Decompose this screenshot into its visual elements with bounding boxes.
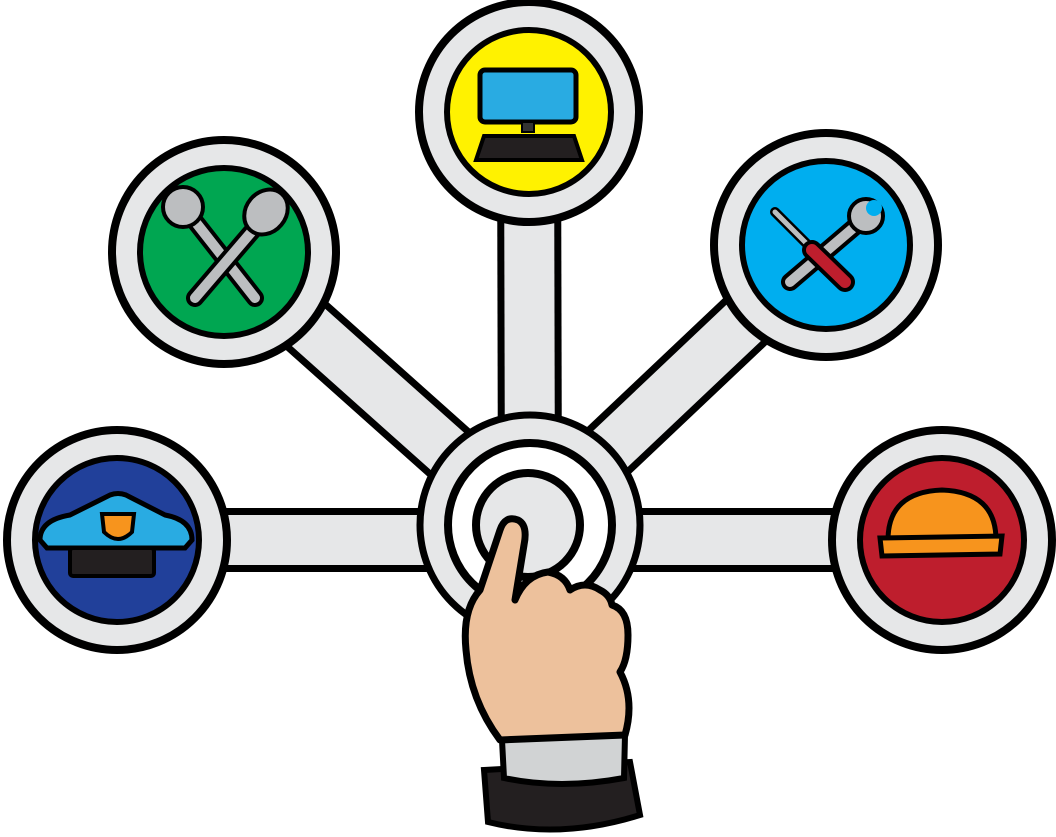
node: tools (blue) — [714, 133, 938, 357]
hub — [420, 415, 640, 635]
node: police cap (navy) — [7, 430, 227, 650]
node: hard hat (red) — [832, 430, 1052, 650]
node: fork and spoon (green) — [112, 140, 336, 364]
hand pointer — [465, 519, 640, 830]
spokes — [117, 112, 942, 540]
node: computer (yellow) — [419, 2, 639, 222]
